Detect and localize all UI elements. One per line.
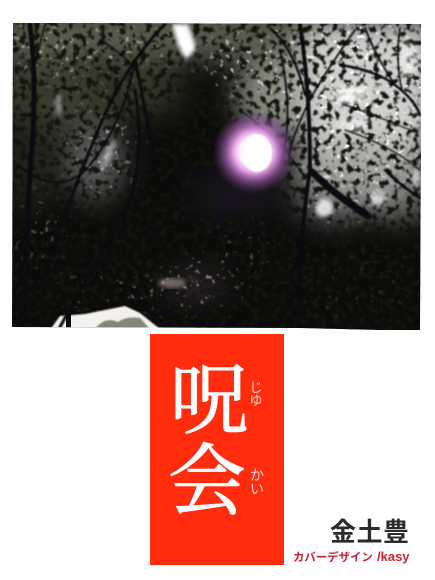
ruby: じゅ: ゆ bbox=[249, 393, 263, 408]
cover design credit: カバーデザイン bbox=[293, 550, 373, 564]
photo: sun through trees bbox=[12, 23, 421, 330]
ruby: かい bbox=[250, 467, 264, 497]
title: 呪会: 呪 bbox=[170, 357, 248, 444]
branches bbox=[18, 24, 420, 328]
red title panel bbox=[150, 334, 284, 565]
bright sky patches bbox=[55, 24, 420, 217]
ruby: かい: い bbox=[250, 481, 264, 497]
sun flare bbox=[212, 110, 296, 194]
ground light at bottom left bbox=[52, 278, 186, 330]
cover design credit: /kasy bbox=[377, 549, 410, 564]
ruby: じゅ bbox=[249, 380, 263, 408]
title: 呪会 bbox=[168, 357, 248, 525]
title: 呪会: 会 bbox=[168, 438, 246, 525]
foliage shadow bbox=[10, 20, 425, 332]
author name: 金土豊 bbox=[330, 517, 409, 547]
dark canopy base bbox=[10, 20, 425, 332]
ruby: かい: か bbox=[250, 467, 264, 483]
ruby: じゅ: じ bbox=[249, 380, 263, 395]
soft light distribution bbox=[0, 10, 435, 299]
cover design credit bbox=[293, 549, 410, 564]
sky through leaves bbox=[10, 20, 425, 332]
